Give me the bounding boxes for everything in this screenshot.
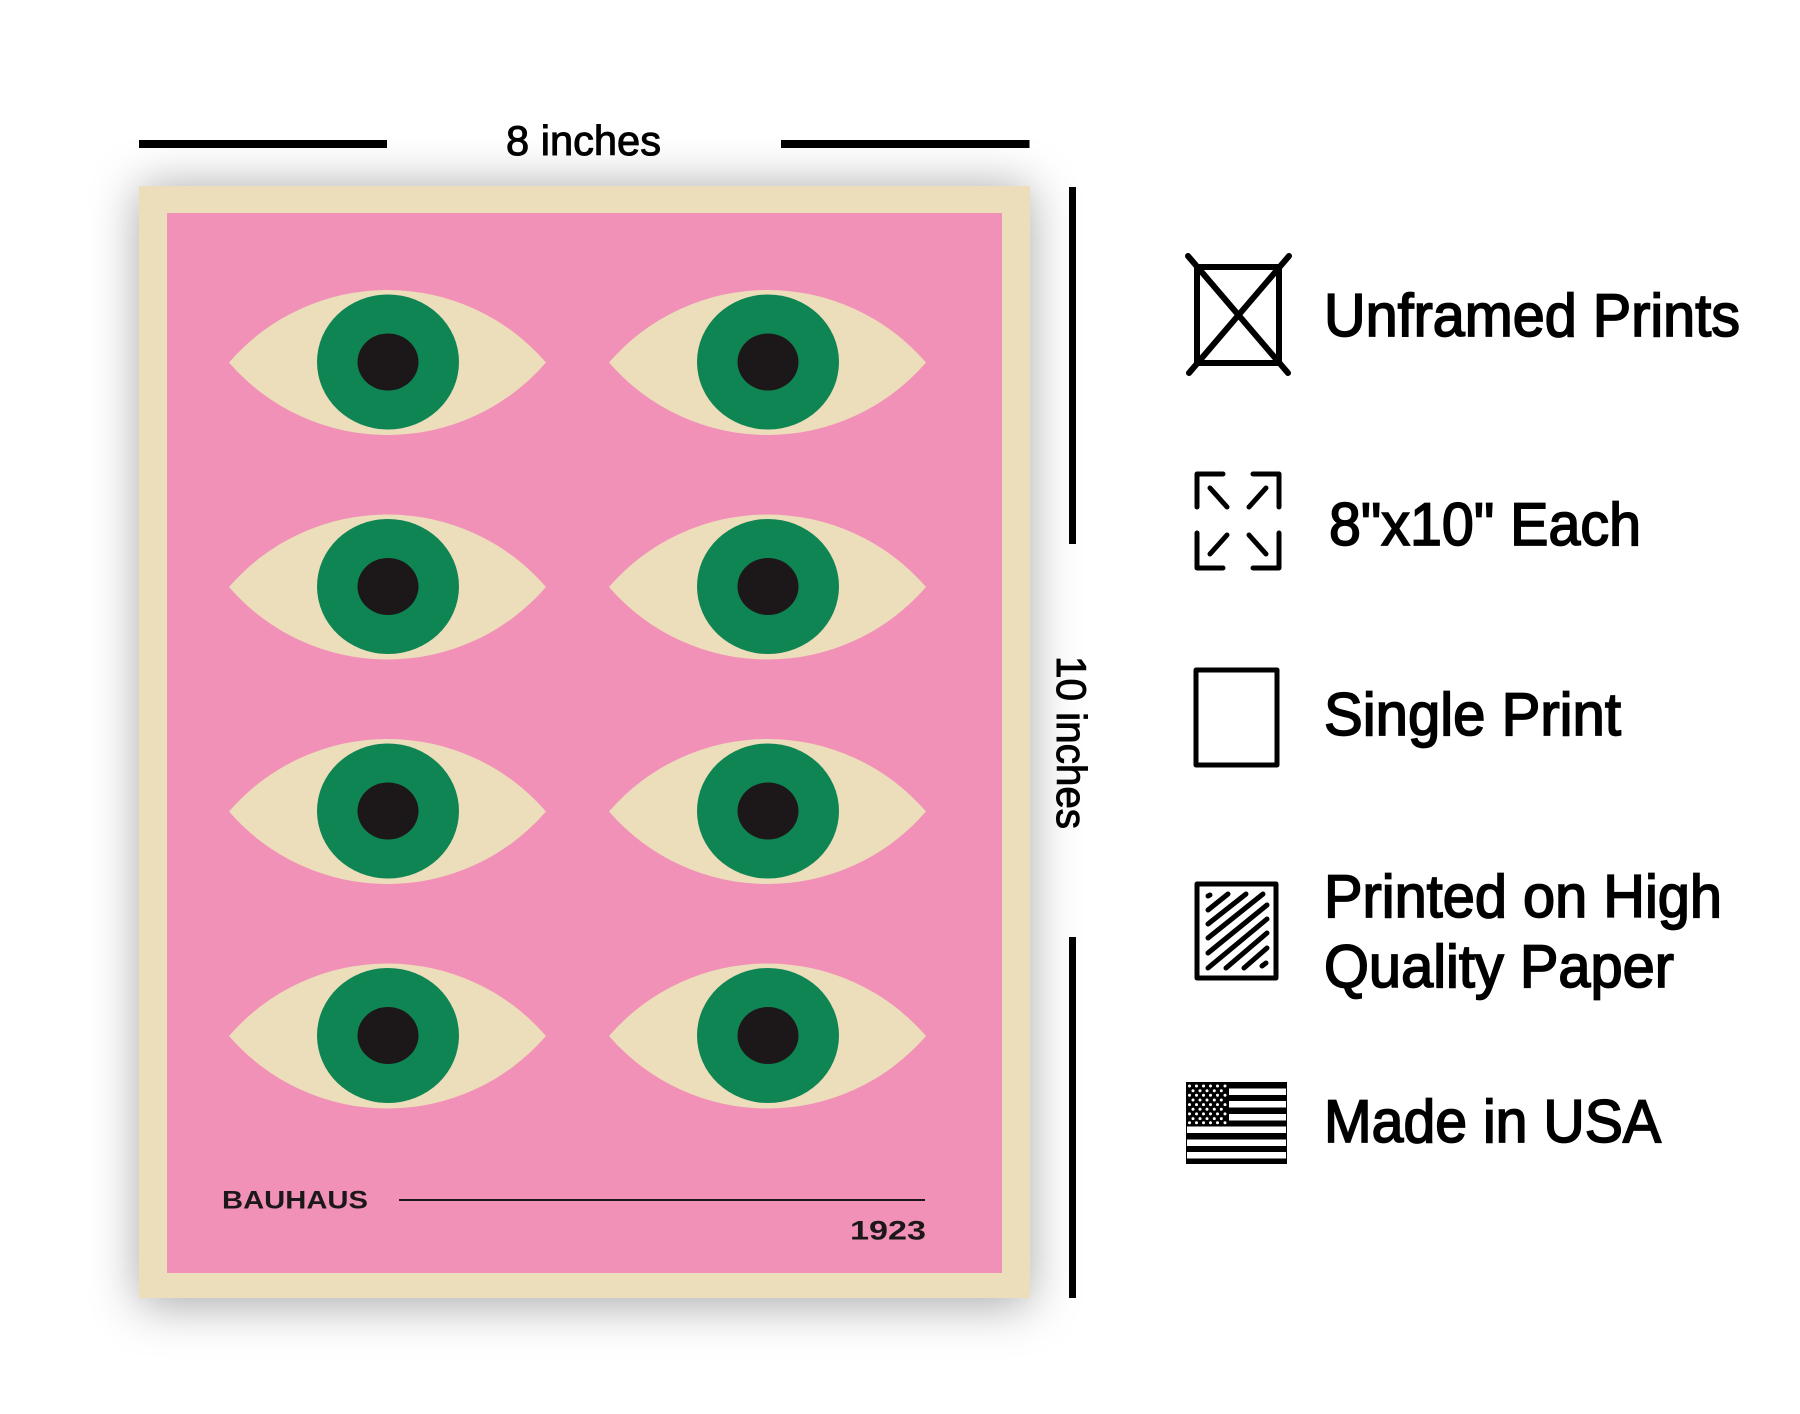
poster year: 1923: 1923 xyxy=(850,1216,926,1246)
eye row 1 right xyxy=(609,290,926,435)
label: Single Print: Single Print xyxy=(1324,681,1621,748)
label: 8"x10" Each: 8"x10" Each xyxy=(1329,491,1641,558)
eye row 4 right xyxy=(609,963,926,1109)
eye row 4 left xyxy=(229,963,546,1109)
label: Printed on High Quality Paper: Printed on High xyxy=(1324,863,1722,930)
poster shadow xyxy=(139,187,1030,1305)
icon: dimensions arrows xyxy=(1197,474,1279,568)
eye row 3 left xyxy=(229,739,546,884)
label: Printed on High Quality Paper xyxy=(1324,863,1722,1000)
eye row 2 right xyxy=(609,514,926,660)
icon: high quality paper xyxy=(1197,884,1276,978)
width dimension: 8 inches: 8 inches xyxy=(506,117,661,164)
eye row 2 left xyxy=(229,514,546,660)
icon: american flag xyxy=(1186,1082,1287,1164)
height dimension: 10 inches xyxy=(1048,187,1095,1298)
panel: bauhaus poster xyxy=(139,186,1030,1298)
height dimension: 10 inches: 10 inches xyxy=(1048,656,1095,829)
eye row 3 right xyxy=(609,739,926,884)
poster title: BAUHAUS: BAUHAUS xyxy=(222,1186,368,1214)
eye row 1 left xyxy=(229,290,546,435)
width dimension: 8 inches xyxy=(139,117,1030,164)
icon: single print xyxy=(1196,670,1277,765)
label: Made in USA: Made in USA xyxy=(1324,1088,1661,1155)
label: Printed on High Quality Paper: Quality Paper xyxy=(1324,933,1674,1000)
icon: unframed xyxy=(1188,256,1289,373)
label: Unframed Prints: Unframed Prints xyxy=(1324,282,1740,349)
